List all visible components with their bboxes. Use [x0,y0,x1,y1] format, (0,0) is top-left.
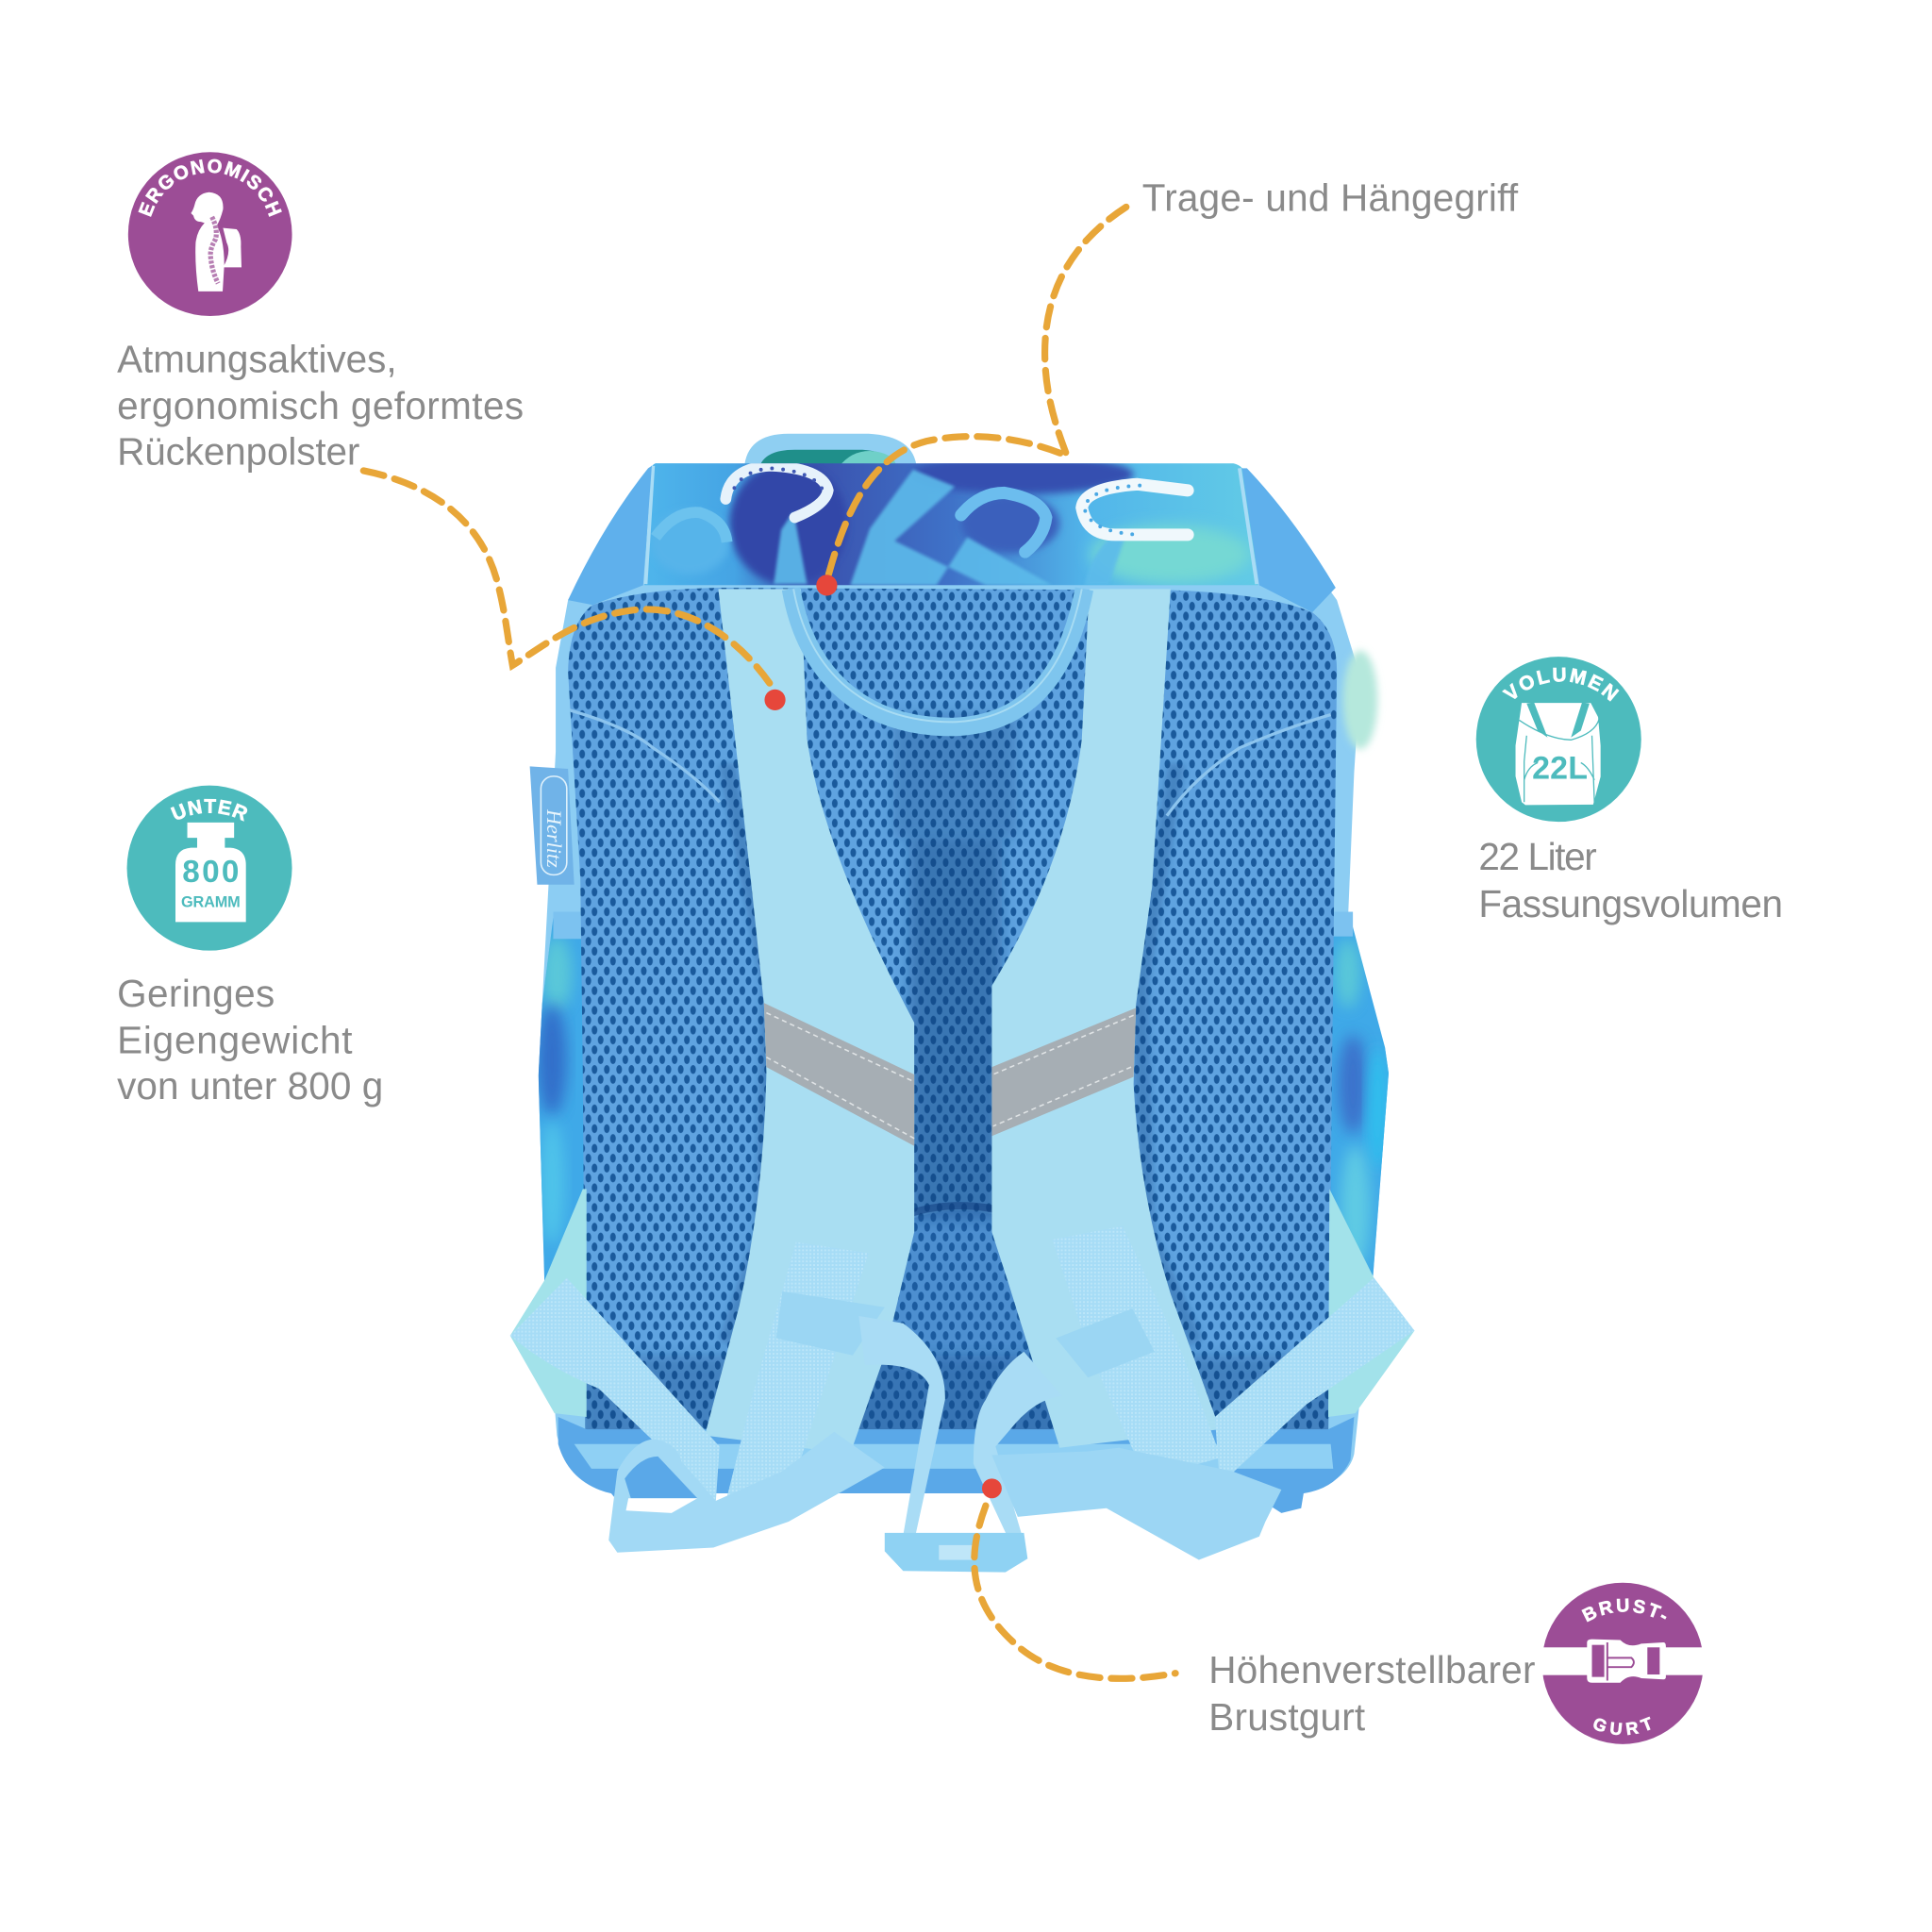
badge: chest strap: BRUST- [1581,1598,1667,1623]
text: weight: Eigengewicht [117,1019,353,1062]
text: chest strap: Brustgurt [1208,1695,1365,1739]
icon: body with spine [191,192,242,291]
carry handle loop [791,589,1084,727]
right side webbing strap [1215,1277,1414,1485]
text: weight: Geringes [117,972,275,1015]
badge: volume [1475,657,1641,823]
icon: weight [175,823,246,922]
badge: chest strap [1543,1583,1703,1744]
mesh back panel [568,588,1343,1454]
badge: ergonomisch [128,152,292,316]
left strap loop opening [625,1457,697,1513]
icon: buckle [1587,1640,1666,1683]
flap piping left [645,466,653,584]
badge: weight: GRAMM [181,893,241,910]
flap piping right [1240,468,1257,584]
side band left [553,912,583,939]
badge: ergonomisch: ERGONOMISCH [138,158,282,217]
brand tag: Herlitz [542,808,566,868]
loose strap left [608,1432,885,1553]
right webbing and adjuster [974,1226,1221,1538]
flap left shoulder [568,466,652,605]
mint lining right [1328,1189,1414,1417]
right side pocket [1330,926,1389,1276]
left shoulder strap [705,589,914,1454]
badge: weight: 800 [182,855,239,890]
text: carry handle: Trage- und Hängegriff [1142,175,1519,219]
base zip edge [575,1444,1333,1469]
text: back padding: Atmungsaktives, [117,337,397,380]
backpack body [539,463,1389,1493]
badge: weight [126,785,292,951]
badge: volume: VOLUMEN [1502,668,1619,702]
text: weight [117,972,383,1108]
left reflector [764,1003,914,1146]
faint horseshoe [656,512,727,542]
pointer: back padding [363,471,786,710]
left side pocket [538,918,584,1281]
badge: weight: UNTER [170,798,247,822]
left side webbing strap [510,1277,720,1501]
base of backpack [558,1417,1354,1513]
pointer: carry handle [816,207,1126,596]
text: volume: 22 Liter [1478,835,1597,878]
horse silhouette [774,470,1127,585]
side band right [1325,912,1353,937]
text: volume: Fassungsvolumen [1478,882,1783,925]
text: back padding [117,337,524,473]
right shoulder strap [991,589,1220,1448]
flap right shoulder [1242,468,1336,612]
text: chest strap [1208,1648,1535,1739]
left webbing and adjuster [727,1242,945,1535]
icon: backpack: 22L [1532,750,1588,786]
badge: chest strap: GURT [1593,1717,1651,1736]
pointer: chest strap [974,1478,1175,1678]
text: back padding: ergonomisch geformtes [117,384,524,427]
backpack photo [510,434,1414,1573]
chest buckle [885,1533,1027,1573]
horseshoe left [725,466,828,518]
right reflector [991,1008,1136,1136]
horseshoe right [1082,484,1188,535]
mint lining left [510,1189,587,1417]
icon: backpack [1516,702,1601,805]
horseshoe center [961,492,1046,552]
loose strap right [991,1448,1281,1560]
brand tag [530,766,575,885]
text: volume [1478,835,1783,925]
top hanging handle [744,434,917,468]
text: back padding: Rückenpolster [117,429,359,473]
printed top flap [644,463,1258,585]
text: weight: von unter 800 g [117,1064,383,1108]
mint pom charm [1343,651,1377,749]
text: chest strap: Höhenverstellbarer [1208,1648,1535,1691]
